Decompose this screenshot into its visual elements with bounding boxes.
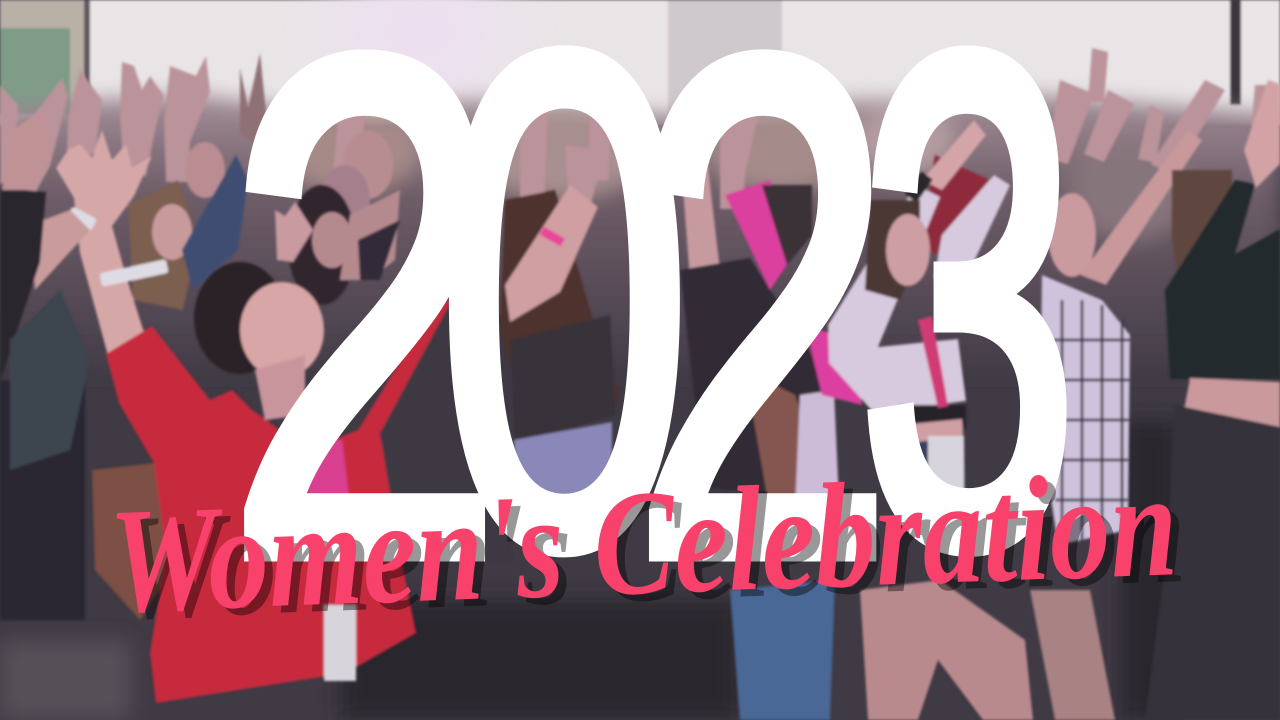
blue sleeve	[182, 155, 248, 290]
woman in white top	[828, 185, 966, 413]
red jacket	[106, 295, 450, 703]
hair and face of laughing woman	[194, 262, 286, 374]
woman with long hair, centre-right	[680, 150, 720, 280]
foreground left arm and hand	[56, 130, 152, 363]
dark sleeves at far left	[0, 188, 46, 382]
background raised hands	[0, 48, 1280, 211]
dark centre clothing	[380, 290, 510, 560]
back wall	[0, 0, 1280, 125]
red top behind white sleeves	[920, 155, 990, 265]
lanyard on red jacket	[308, 440, 350, 505]
background heads and hair	[185, 142, 225, 198]
woman in dark top at right	[1172, 170, 1232, 340]
jeans and legs	[730, 580, 835, 720]
woman in checked dress	[1040, 275, 1130, 545]
patterned skirt	[92, 460, 190, 620]
centre hair and dark top	[500, 190, 620, 430]
small hand beside the sleeve	[275, 202, 313, 262]
big year number	[224, 0, 1079, 706]
